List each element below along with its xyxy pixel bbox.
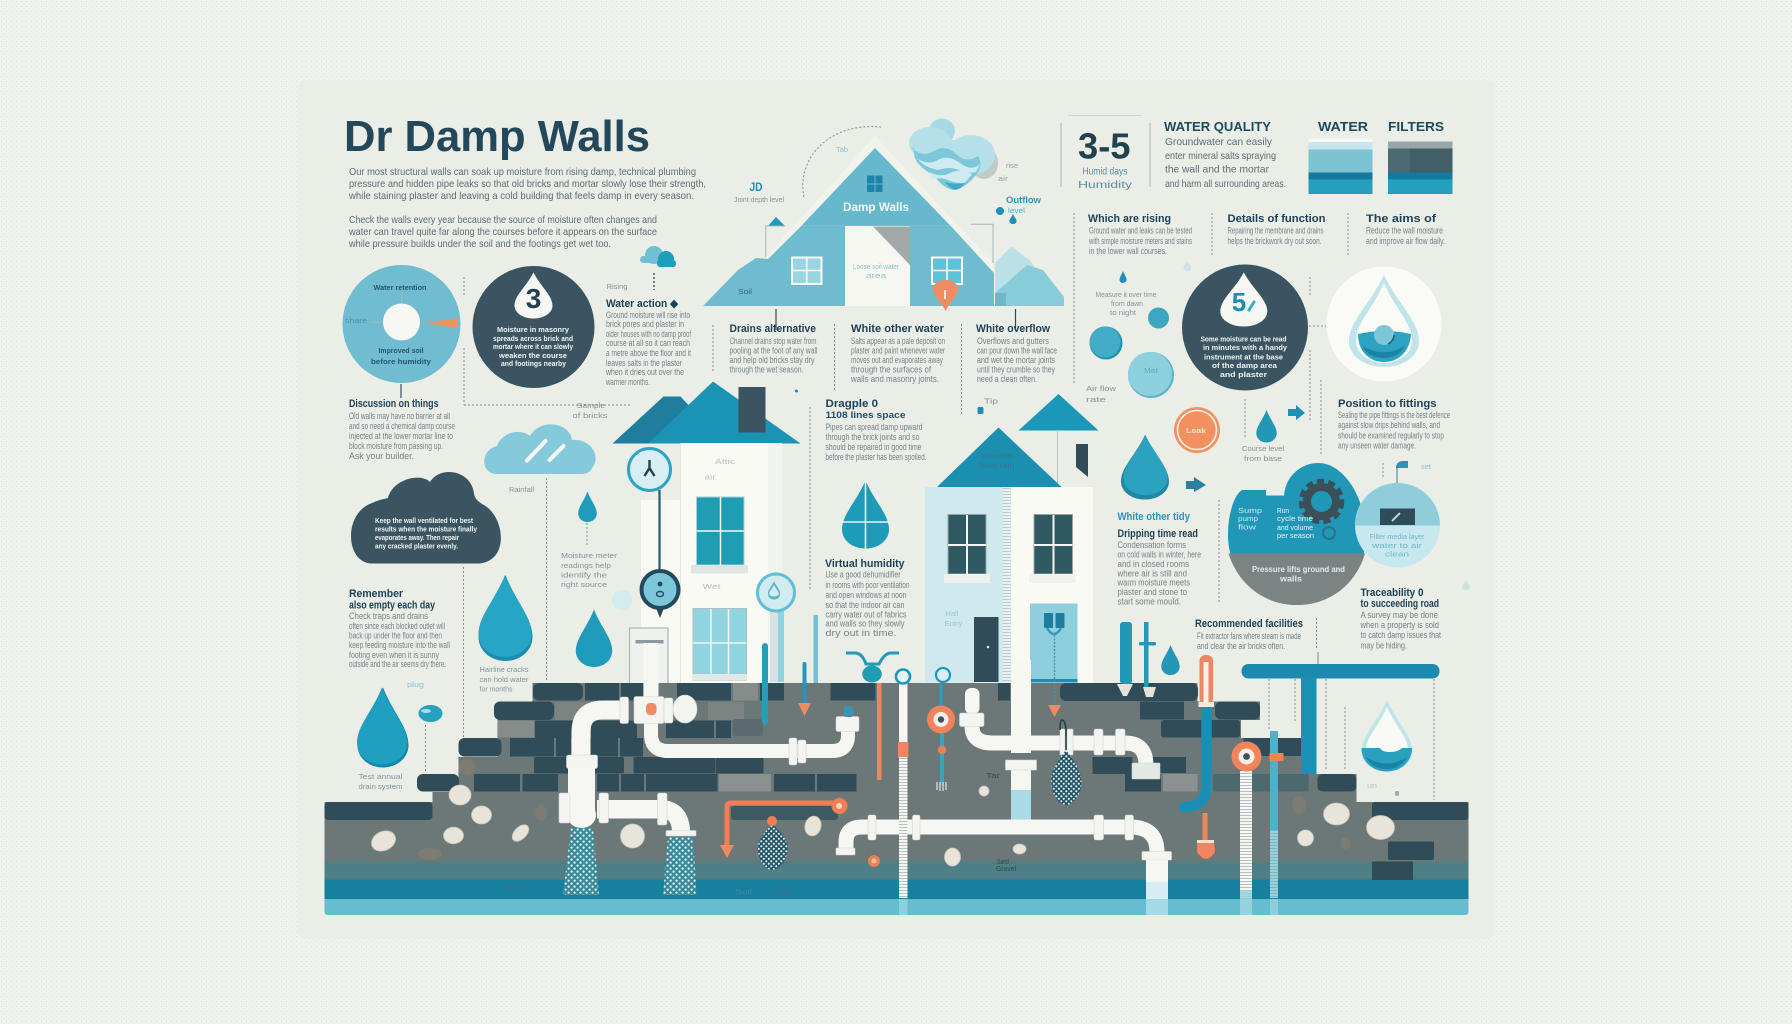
gauge 1	[628, 448, 670, 490]
text block: drain alternative: Drains alternative	[730, 323, 816, 335]
posts and gauges	[877, 655, 1284, 915]
labels on ground	[504, 771, 1016, 896]
diagram: gear bubble: cycle time	[1277, 514, 1313, 523]
labels on ground: Tar	[986, 771, 1001, 780]
stat circle: 5: 5	[1232, 287, 1246, 317]
icon: big drop: Hairline cracks	[480, 665, 529, 674]
text block: discussion: block moisture from passing up.	[349, 441, 443, 451]
text block: details of function: helps the brickwork dry out soon.	[1228, 236, 1322, 246]
illustration: wave cloud: rise	[1006, 161, 1018, 170]
stat: 3-5 box: 3-5	[1078, 126, 1130, 166]
text block: position to fittings	[1338, 398, 1450, 450]
left orange stem	[877, 683, 882, 780]
icon: blue cloud	[484, 424, 596, 474]
diagram: small filter bubble: clean	[1385, 550, 1409, 558]
bubbles: Mist	[1144, 366, 1159, 375]
text block: traceability: may be hiding.	[1360, 640, 1407, 650]
text block: remember: Remember	[349, 588, 404, 600]
stat circle: 5: instrument at the base	[1204, 352, 1283, 362]
text block: remember: footing even when it is sunny	[349, 650, 439, 660]
icons: right drops: from base	[1244, 454, 1282, 463]
stat circle: 5	[1182, 264, 1308, 390]
label: note under line: of bricks	[572, 411, 608, 420]
text block: white other water: White other water	[851, 323, 945, 335]
text block: drain alternative: pooling at the foot of any wall	[730, 346, 818, 356]
text block: traceability: A survey may be done	[1360, 610, 1438, 620]
text block: white other tidy: on cold walls in winter, here	[1118, 550, 1201, 560]
icon: lower-left drop: plug	[407, 680, 424, 689]
gear	[1302, 482, 1342, 522]
text block: water action	[605, 298, 691, 387]
text block: remember: Check traps and drains	[349, 611, 429, 621]
text block: virtual humidity: and walls so they slowly	[826, 618, 905, 628]
swatch: filters: FILTERS	[1388, 119, 1444, 134]
text block: recommended facilities: Fit extractor fans where steam is made	[1197, 631, 1301, 641]
icon: medium drop	[576, 610, 612, 667]
illustration: left house: Wet	[702, 582, 722, 591]
text block: details of function	[1228, 213, 1326, 246]
drop with note: identify the	[561, 570, 607, 580]
icon: water drop lower right	[1362, 700, 1412, 796]
stat circle: 3: mortar where it can slowly	[493, 342, 574, 351]
stat circle: 3: Moisture in masonry	[497, 325, 570, 334]
flag	[768, 217, 785, 226]
text block: discussion: Ask your builder.	[349, 451, 414, 461]
text: Tab	[836, 145, 848, 154]
text block: white other water: plaster and paint whenever water	[851, 346, 945, 356]
text block: dragple: 1108 lines space	[826, 410, 906, 421]
text block: bubble note: to night	[1110, 308, 1137, 317]
text block: water quality: enter mineral salts spraying	[1165, 150, 1276, 162]
text block: water action: warmer months.	[605, 377, 650, 387]
stat circle: 5: and plaster	[1220, 370, 1267, 379]
text block: position to fittings: should be examined regularly to stop	[1338, 430, 1444, 440]
text block: the aims of: and improve air flow daily.	[1366, 236, 1445, 246]
pipe: lower left outflow	[559, 768, 696, 836]
text block: intro: water can travel quite far along the courses before it appears on the surface	[348, 226, 657, 238]
pie chart: water retention: share	[345, 316, 367, 325]
text block: white other tidy: start some mould.	[1118, 596, 1181, 606]
label: note under line: Sample	[577, 401, 605, 410]
handlebar tap	[846, 653, 899, 682]
front roof	[937, 428, 1062, 487]
text block: which are rising: with simple moisture meters and stains	[1088, 236, 1192, 246]
text block: white other water: moves out and evaporates away	[851, 355, 943, 365]
text block: remember: outside and the air seems dry there.	[349, 659, 446, 669]
text block: traceability: Traceability 0	[1360, 587, 1424, 599]
text block: position to fittings: Sealing the pipe fittings is the best defence	[1338, 410, 1450, 420]
labels on ground: Table	[504, 884, 525, 893]
text block: position to fittings: Position to fittings	[1338, 398, 1436, 410]
bubbles	[1090, 308, 1174, 398]
icon: big drop	[478, 575, 532, 694]
text block: virtual humidity: dry out in time.	[826, 628, 896, 638]
illustration: large top house: Soil	[738, 287, 752, 296]
text block: water quality: WATER QUALITY	[1164, 119, 1271, 134]
pipe: orange outflow	[720, 798, 880, 870]
text block: white other tidy: Dripping time read	[1118, 528, 1198, 540]
illustration: large top house: area	[866, 271, 887, 280]
label: JD	[734, 180, 784, 204]
illustration: large top house	[703, 127, 1064, 311]
text block: details of function: Details of function	[1228, 213, 1326, 225]
arrow: small right	[1288, 405, 1305, 420]
label: water marker: level	[1008, 206, 1025, 215]
text block: white overflow: can pour down the wall face	[977, 346, 1057, 356]
right window	[932, 257, 962, 284]
text block: virtual humidity: and open windows at noon	[826, 590, 907, 600]
icon: big drop: for months	[480, 684, 513, 694]
illustration: left house	[612, 382, 818, 684]
text block: the aims of	[1366, 213, 1445, 246]
text block: water action: brick pores and plaster in	[606, 319, 684, 329]
text block: water action: when it dries out over the	[605, 367, 684, 377]
text: Rainfall	[509, 485, 534, 494]
ladder strip	[1002, 487, 1011, 682]
labels on ground: Gravel	[996, 864, 1016, 873]
text block: traceability	[1360, 587, 1441, 650]
label: small	[1086, 384, 1117, 404]
text block: drain alternative: through the wet season.	[730, 364, 804, 374]
text block: remember: also empty each day	[349, 600, 436, 612]
illustration: right house: Shelter	[980, 451, 1014, 460]
door	[974, 617, 998, 682]
stat circle: 3	[472, 266, 594, 388]
orange lower	[1202, 813, 1208, 840]
pie chart: water retention: Water retention	[374, 283, 427, 292]
diagram: gear bubble: Sump	[1238, 506, 1262, 515]
left feeder pipes	[762, 643, 811, 725]
diagram: gear bubble: walls	[1279, 574, 1302, 584]
stones	[368, 759, 1395, 866]
text block: dragple: before the plaster has been spoiled.	[826, 452, 926, 462]
icon: white drop	[514, 272, 552, 318]
text block: virtual humidity: Virtual humidity	[825, 558, 905, 570]
diagram: gear bubble: per season	[1277, 531, 1314, 540]
text block: position to fittings: against slow drips behind walls, and	[1338, 420, 1440, 430]
label: small: rate	[1086, 395, 1106, 404]
text block: dragple	[826, 398, 926, 462]
text block: drain alternative: Channel drains stop water from	[730, 336, 816, 346]
callout: dark cloud: results when the moisture finally	[375, 524, 478, 534]
label: JD: Joint depth level	[734, 195, 784, 204]
gauge 3	[758, 574, 794, 682]
roof	[802, 148, 950, 226]
joint	[620, 697, 628, 724]
text block: recommended facilities: and clear the air bricks often.	[1197, 641, 1285, 651]
diagram: gear bubble: and volume	[1277, 523, 1313, 532]
text block: drain alternative	[713, 309, 818, 374]
text block: virtual humidity: so that the indoor air can	[826, 600, 905, 610]
text block: water action: a metre above the floor and it	[606, 348, 691, 358]
arrow: small lower	[1186, 477, 1206, 492]
illustration: large top house: Loose soil water	[853, 262, 899, 271]
blue panel with tap	[1030, 604, 1078, 682]
stat circle: 3: 3	[526, 283, 541, 314]
text block: remember: keep feeding moisture into the wall	[349, 640, 450, 650]
poles with white tips	[1117, 622, 1180, 697]
stat: 3-5 box: Humid days	[1082, 166, 1128, 178]
label: water marker	[996, 195, 1042, 224]
text block: traceability: to catch damp issues that	[1360, 630, 1441, 640]
stat circle: 3: spreads across brick and	[493, 334, 573, 343]
text block: water quality: Groundwater can easily	[1165, 136, 1273, 148]
pie chart: water retention: before humidity	[371, 357, 432, 366]
text block: intro: while pressure builds under the soil and the footings get wet too.	[348, 238, 611, 250]
text block: virtual humidity: carry water out of fabrics	[826, 610, 907, 620]
icon: small cloud: Rising	[607, 282, 627, 291]
illustration: right house: Hall	[946, 609, 959, 618]
text block: position to fittings: any unseen water damage.	[1338, 440, 1416, 450]
illustration: right house: Entry	[945, 619, 962, 628]
text block: discussion: Discussion on things	[349, 398, 438, 410]
dashed arc	[803, 127, 881, 197]
label: note under line	[572, 401, 608, 420]
illustration: right house	[925, 394, 1098, 683]
stat circle: 5: of the damp area	[1212, 361, 1278, 370]
pie chart: water retention: Improved soil	[378, 346, 424, 355]
back roof	[1018, 394, 1098, 430]
drop with note	[561, 492, 618, 589]
text block: white overflow	[962, 309, 1057, 416]
icon: lower-left drop	[357, 680, 442, 791]
stat circle: 5: in minutes with a handy	[1203, 343, 1288, 352]
text block: virtual humidity	[825, 558, 910, 638]
illustration: large top house: Damp Walls	[843, 200, 909, 214]
callout: dark cloud: Keep the wall ventilated for best	[375, 516, 473, 525]
door frame	[630, 628, 668, 684]
text block: water quality: and harm all surrounding areas.	[1165, 178, 1286, 190]
panel: main sheet	[297, 80, 1495, 939]
text block: traceability: when a property is sold	[1360, 620, 1439, 630]
diagram: small filter bubble: set	[1421, 462, 1432, 471]
door panel	[845, 226, 910, 306]
text block: which are rising: in the lower wall courses.	[1089, 246, 1167, 256]
text block: dragple: Dragple 0	[826, 398, 878, 410]
walls	[925, 487, 1011, 682]
back roof	[612, 396, 700, 444]
text block: intro: Our most structural walls can soak up moisture from rising damp, technical plumbing	[349, 166, 696, 178]
tap down line	[1048, 635, 1061, 717]
text block: remember: often since each blocked outlet will	[349, 621, 445, 631]
text block: discussion: Old walls may have no barrier at all	[349, 411, 450, 421]
text block: white overflow: Overflows and gutters	[977, 336, 1049, 346]
text block: white overflow: White overflow	[976, 323, 1050, 335]
illustration: wave cloud: air	[998, 174, 1009, 183]
diagram: gear bubble: flow	[1238, 522, 1257, 532]
text block: white other tidy: warm moisture meets	[1117, 578, 1191, 588]
text block: intro: Check the walls every year because the source of moisture often changes and	[349, 214, 657, 226]
stat circle: 5: Some moisture can be read	[1200, 334, 1287, 344]
stat: 3-5 box	[1061, 116, 1150, 191]
text block: dragple: should be repaired in good time	[826, 442, 922, 452]
icon: split drop	[842, 480, 889, 549]
text block: bubble note: Measure it over time	[1096, 290, 1156, 299]
text block: drain alternative: and help old bricks stay dry	[730, 355, 815, 365]
text block: which are rising	[1088, 213, 1192, 256]
text block: discussion: and so need a chemical damp course	[349, 421, 455, 431]
T-shaped blue pipe	[1242, 652, 1440, 800]
text block: virtual humidity: in rooms with poor ventilation	[826, 580, 910, 590]
text block: intro	[348, 166, 706, 250]
chimney	[738, 387, 766, 432]
text block: which are rising: Which are rising	[1088, 213, 1171, 225]
text block: white overflow: until they crumble so they	[977, 364, 1055, 374]
illustration: left house: air	[704, 472, 716, 482]
drop with note: readings help	[561, 561, 611, 570]
swatch: water: WATER	[1318, 119, 1369, 134]
icon: lower-left drop: drain system	[358, 782, 402, 791]
text block: which are rising: Ground water and leaks can be tested	[1089, 226, 1192, 236]
walls	[680, 443, 782, 684]
front roof	[648, 382, 800, 444]
bricks	[324, 683, 1468, 880]
illustration: right house: from rain	[980, 461, 1014, 470]
label: JD: JD	[750, 180, 763, 194]
upper window	[691, 497, 748, 574]
text block: white other tidy: plaster and stone to	[1118, 587, 1187, 597]
small droplets near stat	[1120, 261, 1192, 283]
post 1	[899, 683, 908, 742]
text block: the aims of: The aims of	[1366, 213, 1436, 225]
gauge post	[1240, 771, 1252, 898]
windows	[944, 514, 990, 583]
orange badge: Leak	[1186, 426, 1207, 435]
text block: intro: while staining plaster and leaving a cold building that feels damp in every season.	[348, 190, 694, 202]
text block: white other tidy: White other tidy	[1118, 511, 1191, 523]
text block: discussion	[349, 398, 455, 461]
text block: remember	[349, 588, 450, 669]
labels on ground: Clay	[775, 886, 794, 895]
text block: white overflow: and wet the mortar joints	[977, 355, 1055, 365]
label: dot marker: Tip	[984, 396, 998, 406]
title: Dr Damp Walls	[344, 112, 650, 161]
diagram: small filter bubble: water to air	[1371, 541, 1423, 550]
blue L pipe	[1184, 706, 1206, 807]
pipe: upper right run	[960, 688, 1160, 805]
post 2 with gauge	[940, 684, 942, 706]
text block: dragple: Pipes can spread damp upward	[826, 422, 923, 432]
illustration: left house: Attic	[715, 457, 735, 466]
stem between gauges	[658, 490, 661, 570]
text block: intro: pressure and hidden pipe leaks so that old bricks and mortar slowly lose their strength,	[349, 178, 706, 190]
diagram: gear bubble: pump	[1238, 514, 1258, 523]
halo behind house	[720, 136, 1000, 306]
text block: white other tidy: Condensation forms	[1118, 540, 1187, 550]
label: dot marker	[978, 396, 998, 414]
text block: bubble note	[1096, 290, 1156, 317]
icon: water drop lower right: un	[1367, 781, 1377, 790]
text block: water quality: the wall and the mortar	[1165, 164, 1269, 176]
icons: right drops: Course level	[1242, 444, 1284, 453]
text block: white other water: walls and masonry joints.	[850, 374, 939, 384]
text block: recommended facilities	[1195, 618, 1303, 651]
pin	[933, 280, 958, 311]
water spray	[563, 828, 696, 895]
icons: right drops	[1121, 380, 1321, 500]
text block: discussion: injected at the lower mortar line to	[349, 431, 453, 441]
stat circle: 3: and footings nearby	[501, 359, 567, 368]
left window	[792, 257, 822, 284]
pipe: upper left network	[566, 640, 859, 768]
pipe: central lower run	[836, 660, 1172, 915]
mountains	[995, 246, 1064, 306]
text block: the aims of: Reduce the wall moisture	[1366, 226, 1443, 236]
text block: water action: Ground moisture will rise into	[606, 310, 690, 320]
text block: water action: Water action ◆	[606, 298, 678, 310]
illustration: ground and water strata	[324, 683, 1468, 915]
label: small: Air flow	[1086, 384, 1117, 393]
callout: dark cloud	[351, 472, 501, 564]
text block: virtual humidity: Use a good dehumidifier	[826, 570, 901, 580]
collars	[789, 738, 797, 765]
diagram: small filter bubble: Filter media layer	[1370, 532, 1425, 541]
diagram: small filter bubble	[1355, 461, 1440, 568]
text block: remember: back up under the floor and then	[349, 630, 442, 640]
icon: small cloud	[607, 246, 676, 291]
text block: dragple: through the brick joints and so	[826, 432, 920, 442]
swatch: filters	[1388, 119, 1452, 194]
labels on ground: Soil	[735, 888, 752, 896]
orange upper pipe	[1200, 655, 1213, 704]
house body	[703, 226, 994, 306]
text block: recommended facilities: Recommended facilities	[1195, 618, 1303, 630]
thin blue post	[1270, 731, 1278, 898]
text block: white other tidy: where air is still and	[1117, 568, 1187, 578]
text block: white other water: through the surfaces of	[851, 364, 931, 374]
illustration: wave cloud	[909, 118, 1018, 190]
text block: water action: course at all so it can reach	[606, 338, 690, 348]
swatch: water	[1308, 119, 1372, 194]
text block: water action: older houses with no damp proof	[606, 329, 691, 339]
pie chart: water retention	[342, 265, 460, 383]
text block: white other water	[834, 323, 945, 390]
text block: white other tidy	[1117, 511, 1201, 606]
icon: big drop: can hold water	[480, 675, 529, 684]
diagram: gear bubble: Run	[1277, 506, 1289, 515]
text block: details of function: Repairing the membrane and drains	[1228, 226, 1324, 236]
text block: white other tidy: and in closed rooms	[1118, 559, 1190, 569]
callout: dark cloud: evaporates away. Then repair	[375, 533, 459, 542]
stat circle: 3: weaken the course	[498, 351, 567, 360]
lower window	[692, 608, 747, 680]
text block: water action: leaves salts in the plaster	[606, 358, 682, 368]
drop with note: right source	[561, 580, 607, 589]
labels on ground: Sand	[997, 857, 1009, 866]
diagram: gear bubble: Pressure lifts ground and	[1252, 564, 1345, 574]
gauge 2	[642, 571, 678, 618]
text block: white overflow: need a clean often.	[977, 374, 1037, 384]
text block: traceability: to succeeding road	[1360, 598, 1439, 610]
text block: white other water: Salts appear as a pale deposit on	[851, 336, 945, 346]
text block: water quality	[1164, 119, 1286, 190]
orange badge	[1174, 407, 1220, 453]
stat: 3-5 box: Humidity	[1078, 179, 1133, 191]
text block: bubble note: from dawn	[1111, 299, 1143, 308]
icon: large drop in white circle	[1326, 266, 1442, 382]
callout: dark cloud: any cracked plaster evenly.	[375, 542, 458, 550]
label: water marker: Outflow	[1006, 195, 1042, 206]
drop with note: Moisture meter	[561, 551, 618, 560]
icon: lower-left drop: Test annual	[358, 772, 403, 781]
diagram: gear bubble	[1228, 463, 1366, 605]
